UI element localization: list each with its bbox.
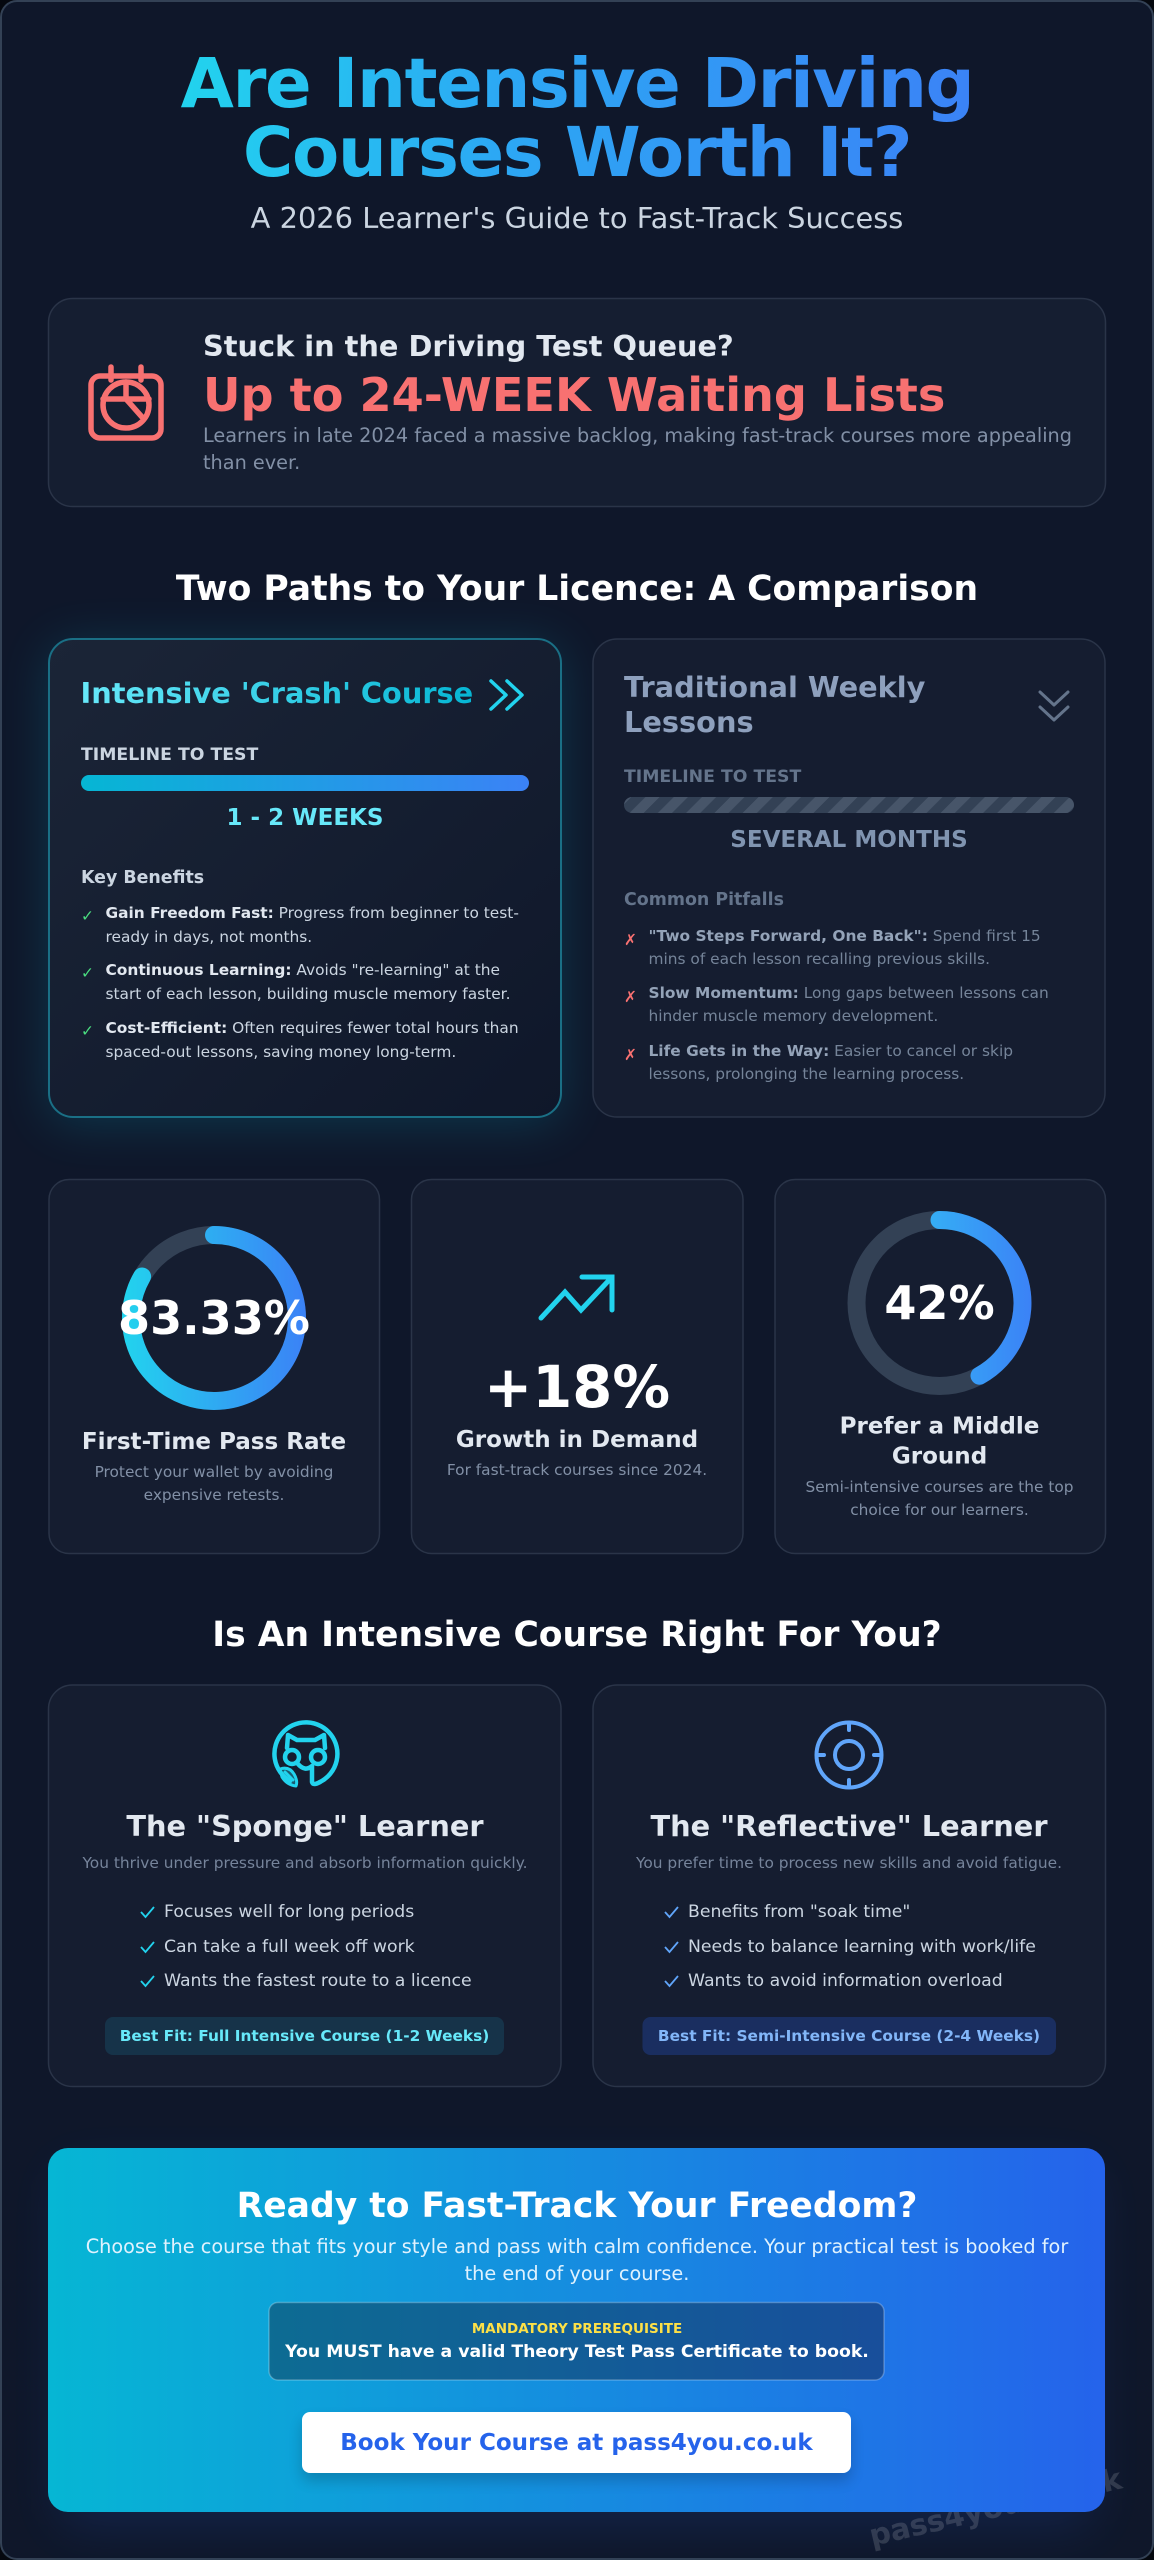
pitfalls list: ✗ bbox=[624, 988, 637, 1006]
benefits list: ✓ bbox=[81, 964, 94, 982]
panel: intensive course bbox=[49, 639, 561, 1123]
icon: sponge learner face bbox=[274, 1722, 337, 1786]
learner heading: The "Sponge" Learner bbox=[126, 1809, 484, 1843]
traditional heading bbox=[624, 670, 926, 739]
prerequisite notice bbox=[269, 2302, 884, 2380]
stat label: Ground bbox=[892, 1444, 987, 1470]
learner traits list bbox=[141, 1902, 472, 1991]
stat label: First-Time Pass Rate bbox=[82, 1429, 346, 1455]
alert description: than ever. bbox=[203, 451, 300, 474]
pitfalls list: Life Gets in the Way: Easier to cancel or skip bbox=[648, 1042, 1013, 1060]
traditional heading: Traditional Weekly bbox=[624, 670, 926, 704]
benefits list: start of each lesson, building muscle memory faster. bbox=[106, 985, 510, 1003]
panel: growth stat bbox=[412, 1180, 743, 1554]
learner traits list: Benefits from "soak time" bbox=[688, 1902, 910, 1922]
benefits list: ✓ bbox=[81, 907, 94, 925]
icon: trending up arrow bbox=[541, 1277, 612, 1318]
alert heading: Stuck in the Driving Test Queue? bbox=[203, 329, 734, 363]
alert description: Learners in late 2024 faced a massive backlog, making fast-track courses more appealing bbox=[203, 424, 1072, 447]
book button: Book Your Course at pass4you.co.uk bbox=[340, 2430, 813, 2456]
timeline label: TIMELINE TO TEST bbox=[624, 767, 801, 787]
stat description: choice for our learners. bbox=[850, 1501, 1029, 1519]
learner description: You prefer time to process new skills and avoid fatigue. bbox=[635, 1854, 1062, 1872]
pitfalls list: mins of each lesson recalling previous skills. bbox=[648, 950, 990, 968]
icon: double chevron right bbox=[491, 681, 522, 709]
best-fit badge: Best Fit: Semi-Intensive Course (2-4 Weeks) bbox=[658, 2027, 1040, 2045]
intensive heading: Intensive 'Crash' Course bbox=[80, 676, 473, 710]
prerequisite notice: You MUST have a valid Theory Test Pass Certificate to book. bbox=[284, 2342, 869, 2362]
benefits list: ready in days, not months. bbox=[106, 928, 312, 946]
learner traits list: Wants to avoid information overload bbox=[688, 1971, 1003, 1991]
stat description bbox=[805, 1478, 1074, 1519]
cta glow bbox=[60, 2170, 1093, 2526]
pitfalls heading: Common Pitfalls bbox=[624, 890, 784, 910]
learner traits list: Focuses well for long periods bbox=[164, 1902, 414, 1922]
learner heading: The "Reflective" Learner bbox=[650, 1809, 1048, 1843]
cta description: the end of your course. bbox=[465, 2262, 689, 2285]
learner description: You thrive under pressure and absorb information quickly. bbox=[81, 1854, 528, 1872]
cta description bbox=[86, 2235, 1068, 2285]
panel: traditional lessons bbox=[593, 639, 1105, 1117]
pitfalls list: lessons, prolonging the learning process. bbox=[648, 1065, 964, 1083]
pitfalls list: "Two Steps Forward, One Back": Spend first 15 bbox=[648, 927, 1041, 945]
panel: middle ground stat bbox=[775, 1180, 1106, 1554]
icon: calendar with pie chart bbox=[91, 367, 161, 438]
traditional heading: Lessons bbox=[624, 705, 754, 739]
best-fit badge: Best Fit: Full Intensive Course (1-2 Weeks) bbox=[120, 2027, 489, 2045]
timeline value: 1 - 2 WEEKS bbox=[227, 805, 383, 831]
stat label bbox=[840, 1414, 1039, 1470]
watermark: pass4you.co.uk bbox=[866, 2461, 1126, 2553]
pitfalls list: ✗ bbox=[624, 931, 637, 949]
stat value: 83.33% bbox=[118, 1291, 310, 1345]
heading: right for you: Is An Intensive Course Right For You? bbox=[212, 1615, 942, 1655]
alert description bbox=[203, 424, 1072, 474]
stat value: 42% bbox=[884, 1276, 995, 1330]
pitfalls list: hinder muscle memory development. bbox=[648, 1007, 938, 1025]
pitfalls list: ✗ bbox=[624, 1046, 637, 1064]
cta description: Choose the course that fits your style and pass with calm confidence. Your practical test is booked for bbox=[86, 2235, 1068, 2258]
book button bbox=[302, 2412, 851, 2481]
stat label: Growth in Demand bbox=[456, 1427, 698, 1453]
benefits list: spaced-out lessons, saving money long-term. bbox=[106, 1043, 456, 1061]
timeline label: TIMELINE TO TEST bbox=[81, 745, 258, 765]
stat description: Protect your wallet by avoiding bbox=[95, 1463, 333, 1481]
stat description: For fast-track courses since 2024. bbox=[447, 1461, 707, 1479]
stat label: Prefer a Middle bbox=[840, 1414, 1039, 1440]
benefits heading: Key Benefits bbox=[81, 868, 204, 888]
timeline value: SEVERAL MONTHS bbox=[730, 827, 968, 853]
best-fit badge bbox=[105, 2017, 504, 2055]
benefits list: Cost-Efficient: Often requires fewer total hours than bbox=[106, 1019, 519, 1037]
heading: comparison: Two Paths to Your Licence: A Comparison bbox=[176, 569, 978, 609]
stat description: expensive retests. bbox=[144, 1486, 284, 1504]
panel: sponge learner bbox=[48, 1685, 561, 2086]
learner traits list bbox=[665, 1902, 1036, 1991]
stat description bbox=[95, 1463, 333, 1504]
title bbox=[181, 44, 973, 193]
prerequisite notice: MANDATORY PREREQUISITE bbox=[472, 2321, 682, 2337]
icon: double chevron down bbox=[1040, 692, 1068, 720]
title: Courses Worth It? bbox=[243, 113, 911, 193]
benefits list: Gain Freedom Fast: Progress from beginner to test- bbox=[106, 904, 519, 922]
panel: pass rate stat bbox=[49, 1180, 380, 1554]
benefits list bbox=[81, 904, 519, 1061]
icon: target bbox=[816, 1722, 882, 1788]
donut chart: 83.33% bbox=[131, 1235, 297, 1401]
striped timeline bar bbox=[624, 797, 1074, 813]
stat value: +18% bbox=[484, 1354, 670, 1421]
stat description: Semi-intensive courses are the top bbox=[805, 1478, 1074, 1496]
panel: reflective learner bbox=[593, 1685, 1106, 2086]
panel: call to action bbox=[48, 2148, 1105, 2512]
donut chart: 42% bbox=[856, 1220, 1022, 1386]
best-fit badge bbox=[642, 2017, 1056, 2055]
pitfalls list bbox=[624, 927, 1049, 1083]
learner traits list: Wants the fastest route to a licence bbox=[164, 1971, 472, 1991]
timeline bar bbox=[81, 775, 529, 791]
subtitle: A 2026 Learner's Guide to Fast-Track Success bbox=[251, 201, 903, 235]
learner traits list: Can take a full week off work bbox=[164, 1937, 415, 1957]
pitfalls list: Slow Momentum: Long gaps between lessons can bbox=[648, 984, 1049, 1002]
cta heading: Ready to Fast-Track Your Freedom? bbox=[237, 2186, 917, 2226]
panel: waiting list alert bbox=[48, 298, 1106, 506]
alert statistic: Up to 24-WEEK Waiting Lists bbox=[203, 368, 945, 422]
benefits list: ✓ bbox=[81, 1022, 94, 1040]
benefits list: Continuous Learning: Avoids "re-learning" at the bbox=[106, 961, 500, 979]
learner traits list: Needs to balance learning with work/life bbox=[688, 1937, 1036, 1957]
title: Are Intensive Driving bbox=[181, 44, 973, 124]
